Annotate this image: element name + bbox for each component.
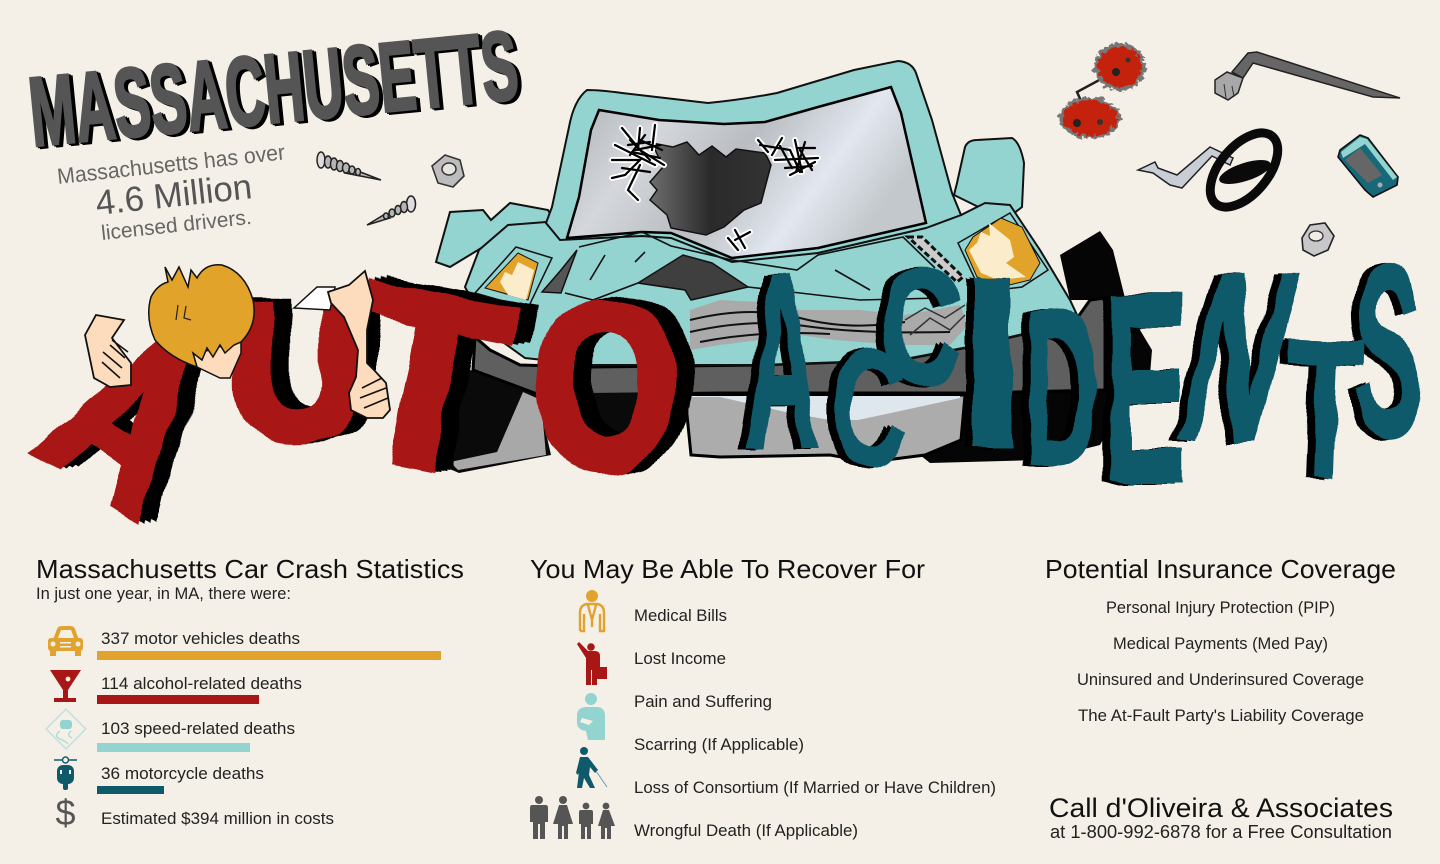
icon: car — [48, 626, 83, 656]
icon: worker with briefcase — [577, 642, 607, 685]
large word: ACCIDENTS: C — [832, 317, 906, 501]
car: right roof pillar — [954, 138, 1024, 220]
icon: nut right — [1302, 223, 1334, 256]
car: roof and pillars — [546, 61, 961, 262]
stat: speed deaths: 103 speed-related deaths — [101, 719, 295, 738]
bar: alcohol deaths — [97, 695, 259, 704]
icon: wrench — [1215, 52, 1400, 100]
icon: smartphone — [1338, 135, 1398, 197]
text block: licensed drivers — [56, 139, 286, 245]
bar: motorcycle deaths — [97, 786, 164, 794]
car: hole in windshield — [650, 142, 771, 235]
firm name: Call d'Oliveira & Associates — [1049, 793, 1393, 823]
car: lower grey bumper — [685, 395, 965, 462]
heading: insurance: Potential Insurance Coverage — [1045, 554, 1396, 584]
call to action — [1049, 793, 1393, 842]
icon: injured person — [577, 693, 605, 740]
hair — [149, 265, 254, 367]
icon: broken steering column — [1138, 147, 1233, 188]
stat: motor vehicle deaths: 337 motor vehicles deaths — [101, 629, 300, 648]
phone number: at 1-800-992-6878 for a Free Consultation — [1050, 822, 1392, 842]
large word: ACCIDENTS: N — [1154, 224, 1322, 492]
hair detail — [176, 305, 191, 320]
text: wrongful death: Wrongful Death (If Applicable) — [634, 821, 858, 840]
text: lost income: Lost Income — [634, 649, 726, 668]
icon: dollar sign: $ — [55, 792, 76, 833]
large word: AUTO: O — [533, 254, 679, 517]
subheading: In just one year, in MA, there were: — [36, 584, 291, 603]
heading: statistics: Massachusetts Car Crash Statistics — [36, 554, 464, 584]
text: pain and suffering: Pain and Suffering — [634, 692, 772, 711]
car: shattered windshield — [567, 87, 926, 258]
icon: screw one — [317, 152, 381, 180]
car: left grey bumper wedge — [450, 392, 546, 470]
car: right black wheel — [920, 231, 1152, 463]
large word: ACCIDENTS: E — [1105, 237, 1187, 539]
icon: doctor — [580, 590, 604, 631]
illustration: crash victim — [85, 265, 390, 418]
icon: scooter — [54, 757, 77, 790]
large word: ACCIDENTS: S — [1354, 217, 1422, 485]
icon: screw two — [367, 196, 416, 225]
icon: cocktail — [50, 670, 81, 702]
icon: slippery road sign — [46, 709, 86, 749]
heading: recover: You May Be Able To Recover For — [530, 554, 925, 584]
large word: ACCIDENTS: D — [1024, 263, 1100, 515]
bar: motor vehicle deaths — [97, 651, 441, 660]
icon: gears — [1059, 43, 1146, 139]
large word: ACCIDENTS: C — [881, 233, 961, 421]
large word: AUTO: T — [329, 233, 527, 529]
coverage item: PIP: Personal Injury Protection (PIP) — [1106, 598, 1335, 617]
text block: licensed drivers: licensed drivers. — [100, 206, 253, 245]
text block: licensed drivers: Massachusetts has over — [56, 139, 286, 189]
car: windshield cracks — [612, 125, 818, 250]
car: black underbody behind O — [585, 393, 655, 448]
coverage item: uninsured: Uninsured and Underinsured Coverage — [1077, 670, 1364, 689]
stat: motorcycle deaths: 36 motorcycle deaths — [101, 764, 264, 783]
car: hood crease lines — [565, 232, 940, 300]
car: right headlight — [958, 213, 1048, 292]
car: crushed engine — [638, 255, 748, 300]
car: left headlight — [475, 247, 552, 308]
stat: cost: Estimated $394 million in costs — [101, 809, 334, 828]
icon: steering wheel — [1197, 121, 1291, 219]
left hand — [85, 315, 131, 387]
face — [193, 340, 241, 378]
panel: insurance coverage — [1045, 554, 1396, 725]
car: dark grey band — [473, 298, 1105, 395]
stat: alcohol deaths: 114 alcohol-related deaths — [101, 674, 302, 693]
car: grey stacked stripes — [690, 300, 968, 350]
large word: ACCIDENTS: I — [958, 228, 1026, 499]
panel: recover for — [530, 554, 996, 840]
white flap on U — [294, 287, 335, 310]
car: dark grille — [542, 250, 577, 293]
large word: ACCIDENTS: T — [1281, 299, 1368, 521]
coverage item: liability: The At-Fault Party's Liability Coverage — [1078, 706, 1364, 725]
icon: nut left — [432, 155, 464, 187]
right arm and hand — [328, 271, 390, 418]
text block: licensed drivers: 4.6 Million — [94, 167, 254, 223]
illustration: wrecked car — [436, 61, 1152, 473]
coverage item: Med Pay: Medical Payments (Med Pay) — [1113, 634, 1328, 653]
icon: family — [530, 796, 615, 839]
panel: crash statistics — [36, 554, 464, 833]
bar: speed deaths — [97, 743, 250, 752]
text: scarring: Scarring (If Applicable) — [634, 735, 804, 754]
car: pale bumper highlight — [685, 396, 960, 420]
large word: ACCIDENTS: A — [744, 224, 820, 500]
text: medical bills: Medical Bills — [634, 606, 727, 625]
large word: ACCIDENTS — [744, 217, 1422, 539]
large word: AUTO: A — [9, 283, 247, 558]
car: left crumpled fender — [436, 203, 552, 267]
text: loss of consortium: Loss of Consortium (If Married or Have Children) — [634, 778, 996, 797]
car: hood and body — [465, 203, 1078, 365]
car: left black wheel well — [436, 357, 551, 473]
large word: AUTO: U — [228, 265, 366, 477]
large word: AUTO — [9, 233, 679, 558]
icon: blind person with cane — [576, 747, 607, 788]
car: bumper strip — [908, 237, 963, 282]
